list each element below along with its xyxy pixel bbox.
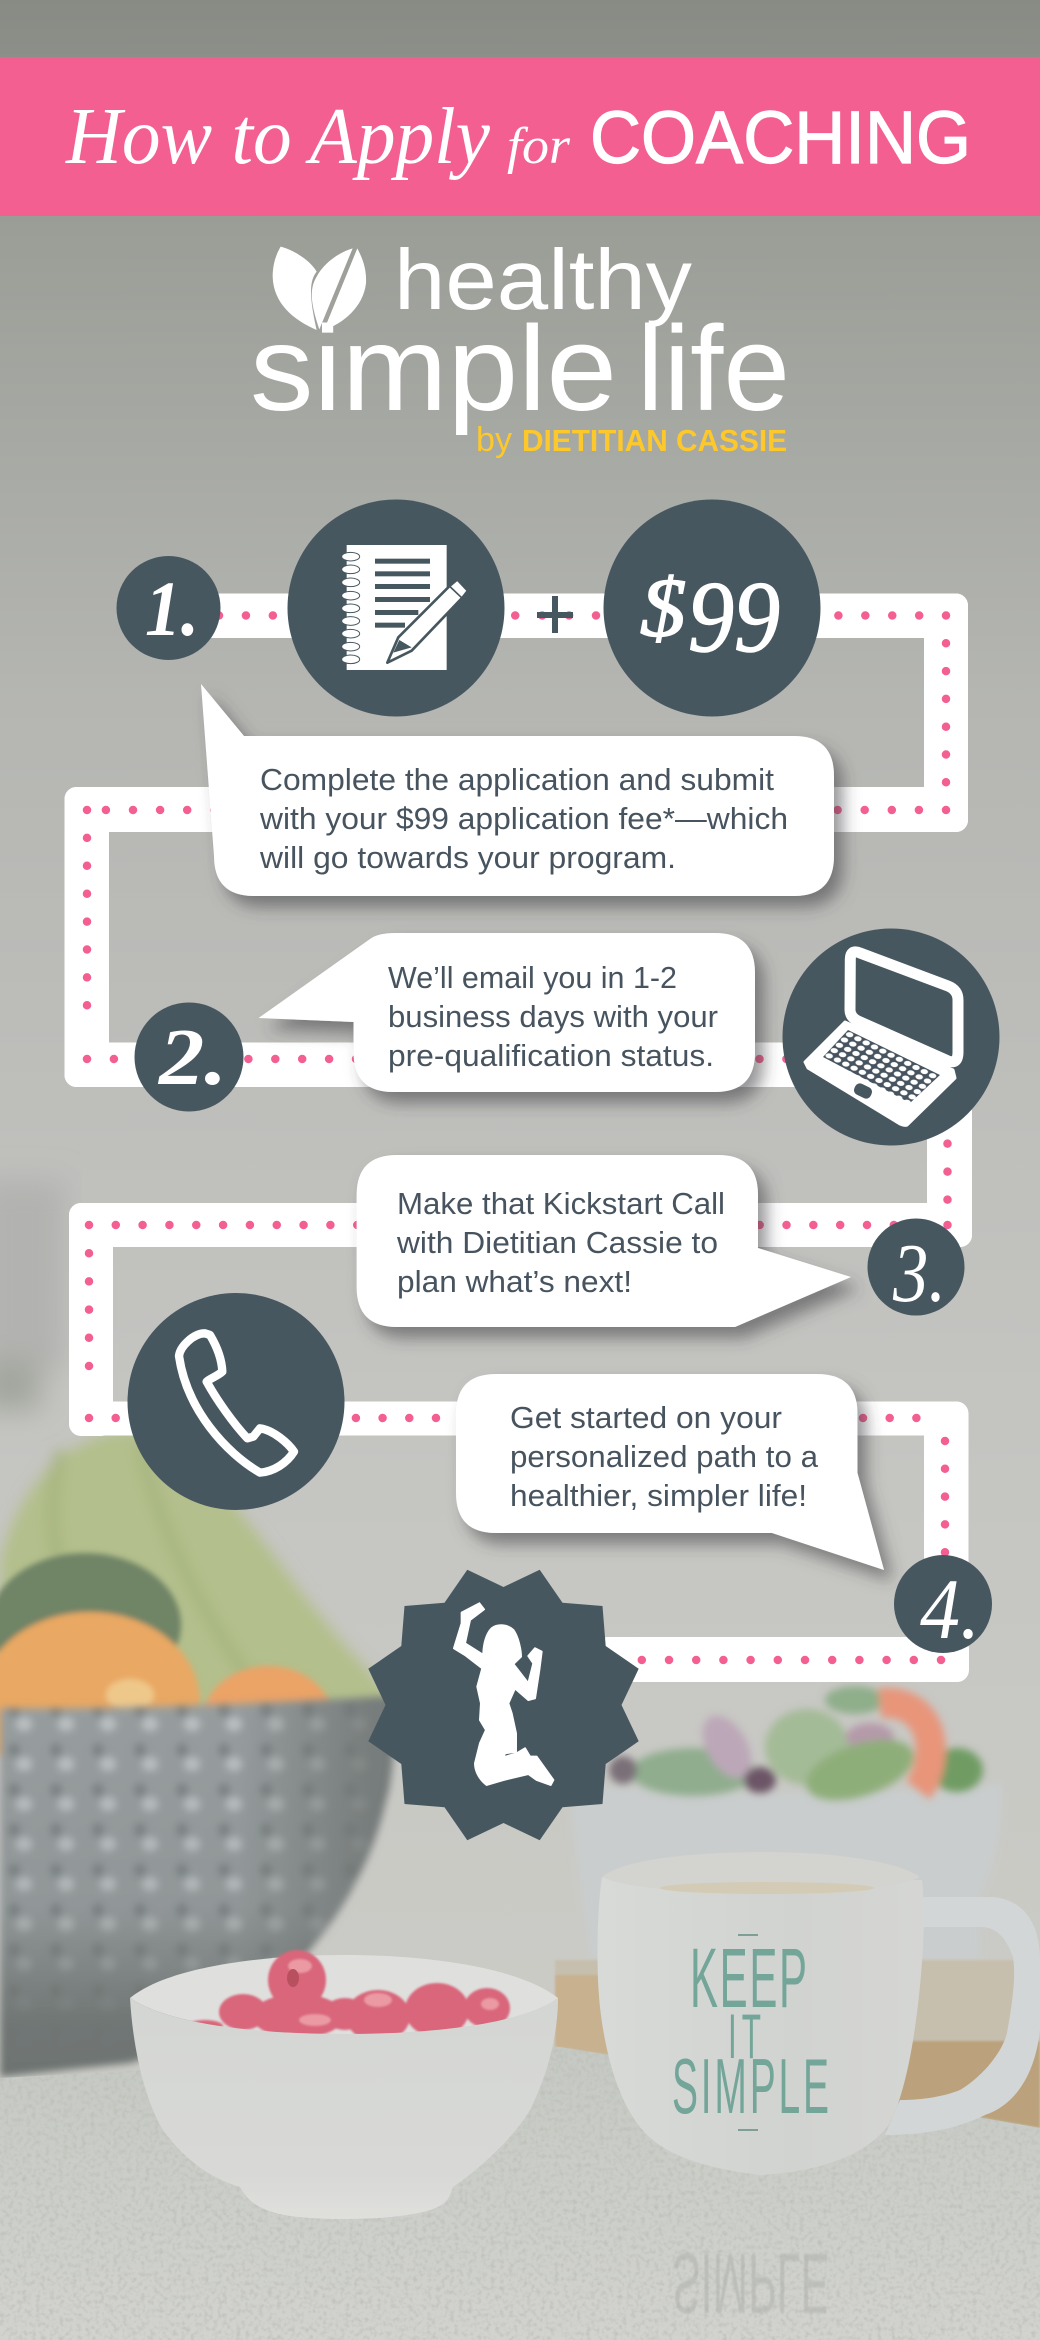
- $99 fee circle: 99: [688, 561, 780, 674]
- title banner: COACHING: [590, 96, 971, 179]
- logo: healthy simple life by Dietitian Cassie: simple: [250, 300, 617, 436]
- $99 fee circle: $: [640, 562, 686, 655]
- icon: star badge with jumping woman: [368, 1570, 639, 1840]
- logo: healthy simple life by Dietitian Cassie: life: [637, 300, 790, 436]
- logo: healthy simple life by Dietitian Cassie: healthy: [394, 233, 693, 328]
- callout: step 1: Complete the application and submit: [260, 762, 774, 797]
- callout: step 3: Make that Kickstart Call: [397, 1186, 725, 1221]
- callout: step 1: with your $99 application fee*—which: [259, 801, 788, 836]
- plus sign: [537, 596, 573, 633]
- callout: step 1: [201, 684, 834, 896]
- dotted path: steps 2 to 4: [69, 1100, 972, 1682]
- callout: step 3: plan what’s next!: [397, 1264, 632, 1299]
- title banner: for: [507, 118, 571, 175]
- logo: healthy simple life by Dietitian Cassie: by: [476, 421, 512, 459]
- callout: step 4: Get started on your: [510, 1400, 782, 1435]
- dotted path: steps 1 to 2: [64, 594, 968, 1087]
- step 2 number: [134, 1002, 244, 1112]
- raspberry bowl: [130, 1950, 558, 2219]
- icon: notebook and pencil: [288, 500, 504, 716]
- logo: healthy simple life by Dietitian Cassie: [250, 233, 790, 459]
- step 2 number: 2.: [158, 1014, 227, 1102]
- step 4 number: 4.: [920, 1561, 980, 1657]
- mug with KEEP IT SIMPLE: [597, 1852, 1040, 2175]
- step 1 number: [116, 556, 220, 660]
- callout: step 1: will go towards your program.: [259, 840, 676, 875]
- icon: laptop: [782, 928, 1000, 1146]
- mug reflection on counter: SIMPLE: [672, 2235, 829, 2330]
- metal bowl: [0, 1696, 394, 2077]
- callout: step 3: with Dietitian Cassie to: [396, 1225, 718, 1260]
- counter top: [0, 2047, 1040, 2340]
- salad bowl: [570, 1686, 1003, 1960]
- mug with KEEP IT SIMPLE: IT: [728, 2001, 761, 2072]
- icon: leaves: [273, 247, 366, 330]
- callout: step 4: healthier, simpler life!: [510, 1478, 807, 1513]
- callout: step 4: personalized path to a: [510, 1439, 819, 1474]
- callout: step 2: We’ll email you in 1-2: [388, 960, 677, 995]
- mug with KEEP IT SIMPLE: SIMPLE: [672, 2043, 829, 2131]
- callout: step 3: [357, 1155, 851, 1327]
- mug with KEEP IT SIMPLE: KEEP: [690, 1932, 807, 2026]
- avocado and oranges: [0, 1553, 334, 1792]
- step 3 number: 3.: [892, 1227, 946, 1320]
- step 3 number: [868, 1218, 964, 1320]
- callout: step 2: [259, 933, 755, 1092]
- bananas: [0, 1430, 395, 1730]
- step 4 number: [894, 1555, 992, 1657]
- icon: phone: [128, 1293, 344, 1510]
- title banner: [0, 57, 1040, 216]
- logo: healthy simple life by Dietitian Cassie: DIETITIAN CASSIE: [522, 423, 787, 458]
- callout: step 4: [456, 1374, 884, 1570]
- callout: step 2: pre-qualification status.: [388, 1038, 714, 1073]
- wooden board: [555, 1960, 1040, 2130]
- title banner: How to Apply: [65, 93, 490, 181]
- $99 fee circle: [604, 500, 820, 716]
- callout: step 2: business days with your: [388, 999, 718, 1034]
- step 1 number: 1.: [145, 565, 199, 652]
